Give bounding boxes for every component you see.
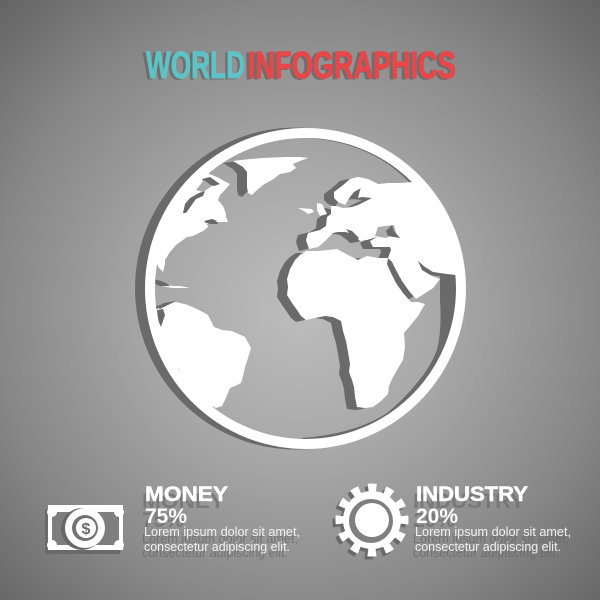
Europe and Asia <box>306 177 456 299</box>
title word: WORLD: WORLD <box>146 45 245 87</box>
Gulf of St Lawrence <box>204 219 217 224</box>
Black Sea shadow <box>386 225 400 238</box>
South American lake <box>176 367 182 375</box>
industry heading: INDUSTRY <box>416 483 528 506</box>
money heading: MONEY <box>145 483 228 506</box>
industry description: consectetur adipiscing elit. <box>415 539 561 554</box>
title word: WORLD <box>143 45 245 88</box>
globe outer shadow <box>135 128 457 450</box>
continent shadows <box>156 162 440 410</box>
industry percentage: 20% <box>416 505 458 528</box>
continents <box>155 157 456 408</box>
globe inner shadow crescent <box>302 133 460 444</box>
Africa <box>287 249 425 408</box>
money description shadow: consectetur adipiscing elit. <box>142 545 288 560</box>
industry text <box>413 483 571 560</box>
Hudson Bay <box>183 191 205 213</box>
globe interior <box>154 136 458 440</box>
money block <box>45 483 300 560</box>
globe <box>130 128 480 450</box>
industry block <box>333 483 571 560</box>
United Kingdom <box>317 203 327 216</box>
money description: Lorem ipsum dolor sit amet, <box>144 524 300 539</box>
Ireland <box>298 208 314 214</box>
Hudson strait <box>196 180 212 192</box>
icon: gear <box>333 484 408 559</box>
industry percentage shadow: 20% <box>413 509 455 532</box>
money heading shadow: MONEY <box>142 490 225 513</box>
money percentage: 75% <box>145 505 187 528</box>
title <box>143 45 456 88</box>
Baffin shadow <box>202 177 220 186</box>
globe ring <box>150 133 461 444</box>
Caribbean shadow <box>155 279 170 286</box>
icon: banknote <box>45 505 124 554</box>
Americas and Greenland <box>156 157 308 408</box>
money description shadow: Lorem ipsum dolor sit amet, <box>142 531 298 546</box>
Black Sea <box>375 225 396 238</box>
title word: INFOGRAPHICS: INFOGRAPHICS <box>248 45 456 87</box>
industry heading shadow: INDUSTRY <box>413 490 525 513</box>
Caribbean islands <box>154 279 190 288</box>
money text <box>142 483 300 560</box>
Pacific shadow <box>157 309 165 327</box>
seas, lakes and coast shadows <box>155 177 400 375</box>
title word: INFOGRAPHICS: INFOGRAPHICS <box>245 46 453 88</box>
money percentage shadow: 75% <box>142 509 184 532</box>
industry description shadow: Lorem ipsum dolor sit amet, <box>413 531 569 546</box>
title word: WORLD: WORLD <box>143 46 243 88</box>
Colombian coast shadow <box>157 301 176 309</box>
industry description: Lorem ipsum dolor sit amet, <box>415 524 571 539</box>
Adriatic shadow <box>346 229 359 240</box>
money description: consectetur adipiscing elit. <box>144 539 290 554</box>
industry description shadow: consectetur adipiscing elit. <box>413 545 559 560</box>
icon: banknote: $ <box>82 521 91 538</box>
